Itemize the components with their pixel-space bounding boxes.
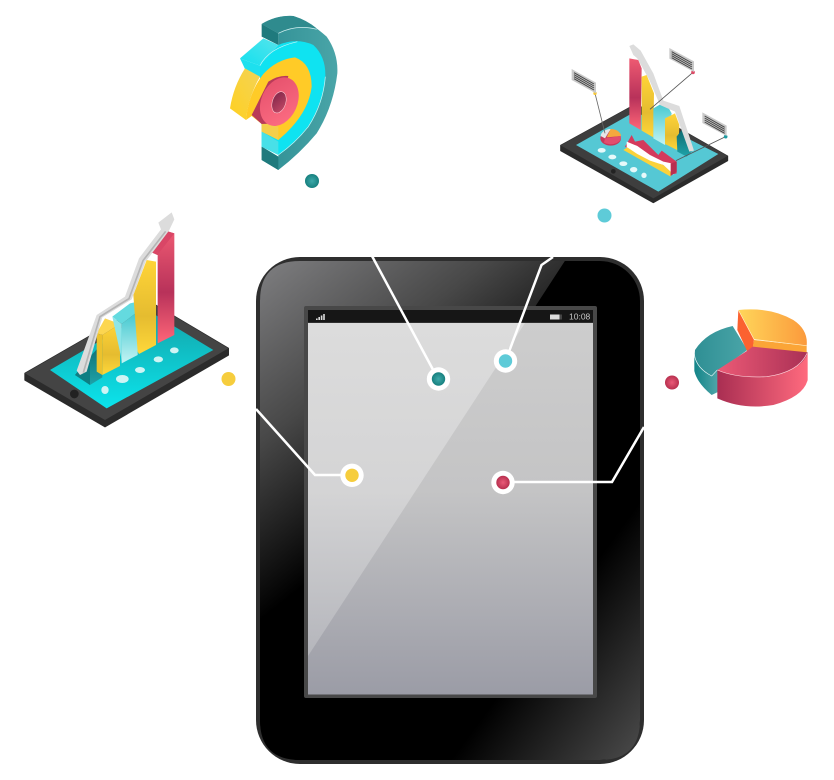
tablet screen (576, 112, 718, 192)
red bar (150, 230, 174, 343)
app icons (598, 148, 647, 178)
growth arrow (77, 212, 174, 375)
connector lines (256, 256, 644, 482)
cyan bar (112, 302, 138, 363)
dot: teal (305, 174, 319, 188)
area ribbon (623, 135, 677, 177)
screen (308, 323, 593, 694)
yellow bar short (97, 318, 120, 375)
bars (629, 44, 694, 157)
icon: 3D pie chart (694, 309, 808, 406)
callout: right (676, 112, 727, 161)
dot: red (665, 376, 679, 390)
tablet device (250, 250, 660, 780)
icon: tablet with rising bar chart (25, 212, 228, 427)
red slice (717, 347, 808, 406)
callout: top (650, 48, 695, 109)
marker: yellow (340, 464, 364, 487)
small app icons (101, 347, 179, 394)
marker: red (491, 471, 515, 494)
dot: yellow (222, 372, 236, 386)
tablet screen (50, 312, 213, 408)
yellow bar tall (133, 260, 156, 354)
callout: left (572, 69, 605, 133)
tablet body (25, 302, 228, 427)
marker: cyan (494, 349, 517, 373)
marker: teal (427, 367, 450, 391)
icon: tablet with dashboard and callouts (561, 44, 728, 203)
mini pie (600, 129, 621, 146)
teal bar (75, 343, 102, 385)
status bar (308, 310, 593, 322)
status bar: 10:08 (569, 312, 591, 322)
orange slice (737, 309, 807, 353)
tablet body (561, 104, 728, 203)
teal slice (694, 326, 747, 395)
dot: cyan (598, 208, 612, 222)
icon: target (230, 16, 337, 170)
